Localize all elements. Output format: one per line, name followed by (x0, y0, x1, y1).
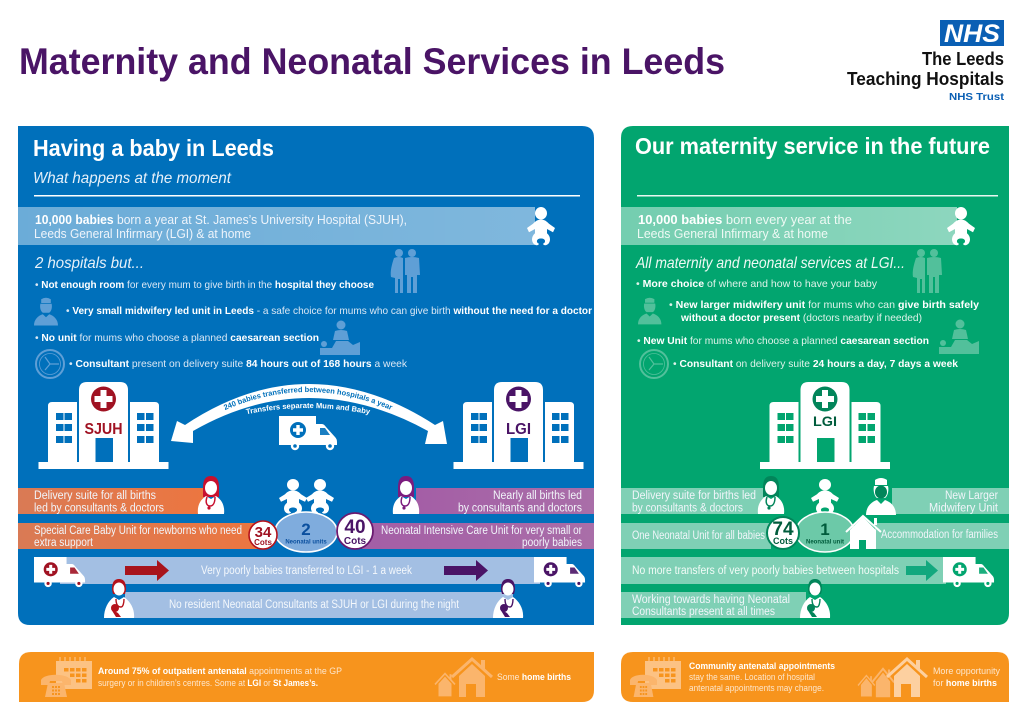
panel: future community services (621, 652, 1009, 702)
icon: baby (527, 207, 555, 245)
band: accommodation (875, 523, 1009, 549)
home births text: for home births (933, 678, 997, 689)
icon: LGI hospital: LGI (813, 413, 837, 429)
arrow: transfers between hospitals: 240 babies transferred between hospitals a year (224, 386, 392, 410)
band: one neonatal unit: One Neonatal Unit for all babies (632, 530, 765, 542)
band: delivery suite: Delivery suite for births led (632, 490, 756, 502)
arrow: purple (444, 560, 488, 581)
band: SJUH delivery suite (18, 488, 204, 514)
badge: 34 cots (249, 521, 277, 549)
band: LGI births: by consultants and doctors (458, 502, 582, 514)
band: special care: Special Care Baby Unit for newborns who need (34, 525, 242, 537)
icon: doctor with baby (800, 579, 830, 618)
badge: 40 cots: Cots (344, 536, 367, 547)
badge: 34 cots: 34 (255, 524, 272, 541)
panel: current community services (19, 652, 594, 702)
neonatal units badge: Neonatal units (285, 540, 327, 546)
bullet: midwifery: without a doctor present (doctors nearby if needed) (680, 312, 922, 324)
icon: caesarean (320, 320, 360, 355)
band: midwifery unit: New Larger (945, 490, 998, 502)
band: transfers to LGI (60, 557, 540, 584)
arrow: green (906, 560, 938, 581)
antenatal text (98, 666, 342, 689)
icon: ambulance LGI (534, 557, 585, 587)
band: no more transfers: No more transfers of very poorly babies between hospitals (632, 565, 899, 577)
bullet: caesarean: • New Unit for mums who choose a planned caesarean section (637, 335, 929, 347)
births band: 10,000 babies born a year at St. James’s University Hospital (SJUH), (35, 212, 407, 227)
antenatal text: Around 75% of outpatient antenatal appointments at the GP (98, 666, 342, 677)
icon: doctor SJUH (198, 476, 224, 514)
NHS logo (847, 20, 1005, 103)
community text: antenatal appointments may change. (689, 683, 824, 694)
icon: SJUH hospital (38, 382, 168, 469)
icon: baby (811, 479, 839, 514)
births band: 10,000 babies born every year at the (638, 212, 852, 227)
panel: having a baby in Leeds (18, 126, 594, 625)
bullet: midwifery (669, 299, 979, 324)
icon: ambulance SJUH (34, 557, 85, 587)
bullet: consultant: • Consultant present on delivery suite 84 hours out of 168 hours a week (69, 358, 408, 370)
neonatal units badge: 2 (301, 520, 311, 539)
icon: ambulance (943, 557, 994, 587)
band: one neonatal unit (621, 523, 771, 549)
icon: clock (640, 350, 668, 378)
icon: calendar (645, 657, 681, 689)
band: no resident consultants (125, 592, 513, 618)
badge: 40 cots: 40 (344, 517, 366, 538)
icon: midwife (638, 298, 661, 324)
band: accommodation: Accommodation for families (881, 529, 998, 541)
icon: telephone (41, 675, 71, 697)
badge: 74 cots: 74 (772, 519, 794, 540)
community text: Community antenatal appointments (689, 661, 835, 672)
band: neonatal intensive care: Neonatal Intensive Care Unit for very small or (381, 525, 582, 537)
band: LGI births: Nearly all births led (493, 490, 582, 502)
arrow: red (125, 560, 169, 581)
births band (18, 207, 535, 245)
icon: couple (913, 249, 942, 293)
neonatal unit badge: 1 (820, 520, 830, 539)
arrow: transfers between hospitals: Transfers separate Mum and Baby (246, 402, 370, 416)
badge: 34 cots: Cots (254, 538, 272, 547)
badge: 40 cots (337, 513, 373, 549)
NHS logo: The Leeds (922, 49, 1004, 69)
NHS logo: Teaching Hospitals (847, 69, 1004, 89)
bullet: midwifery: • Very small midwifery led unit in Leeds - a safe choice for mums who can give birth without the need for a doctor (66, 305, 592, 317)
band: midwifery unit: Midwifery Unit (929, 502, 999, 514)
band: no more transfers (621, 557, 946, 584)
bullet: consultant: • Consultant on delivery suite 24 hours a day, 7 days a week (673, 358, 958, 370)
bullet: caesarean: • No unit for mums who choose a planned caesarean section (35, 332, 319, 344)
neonatal units badge (275, 512, 337, 552)
icon: doctor with baby left (104, 579, 134, 618)
neonatal unit badge: Neonatal unit (806, 540, 844, 546)
icon: midwife (34, 298, 58, 326)
icon: clock (36, 350, 64, 378)
NHS logo: NHS (944, 20, 1000, 48)
badge: 74 cots: Cots (773, 536, 793, 546)
title: Maternity and Neonatal Services in Leeds (19, 41, 725, 82)
band: neonatal consultants: Consultants present at all times (632, 606, 775, 618)
icon: doctor LGI (393, 476, 419, 514)
births band: Leeds General Infirmary & at home (637, 226, 828, 241)
icon: houses (858, 659, 927, 697)
icon: LGI hospital (454, 382, 584, 469)
two hospitals heading: 2 hospitals but... (34, 255, 144, 272)
icon: doctor with baby right (493, 579, 523, 618)
icon: ambulance (279, 416, 337, 450)
icon: LGI hospital: LGI (506, 421, 531, 438)
badge: 74 cots (767, 517, 799, 549)
home births text: More opportunity (933, 666, 1000, 677)
heading: future: Our maternity service in the future (635, 133, 990, 159)
icon: caesarean (939, 320, 979, 354)
births band: Leeds General Infirmary (LGI) & at home (34, 226, 251, 241)
band: neonatal consultants (621, 592, 806, 618)
panel: future service (621, 126, 1009, 625)
bullet: midwifery: • New larger midwifery unit for mums who can give birth safely (669, 299, 979, 311)
band: delivery suite: by consultants & doctors (632, 502, 743, 514)
band: transfers to LGI: Very poorly babies transferred to LGI - 1 a week (201, 565, 412, 577)
arrow: transfers between hospitals (171, 384, 447, 444)
antenatal text: surgery or in children’s centres. Some at LGI or St James’s. (98, 678, 318, 689)
community text: stay the same. Location of hospital (689, 672, 815, 683)
band: SJUH delivery suite: led by consultants & doctors (34, 502, 164, 514)
icon: doctor (758, 476, 784, 514)
heading: having a baby: Having a baby in Leeds (33, 135, 274, 161)
icon: baby (947, 207, 975, 245)
bullet: more choice: • More choice of where and how to have your baby (636, 278, 878, 290)
band: midwifery unit (892, 488, 1009, 514)
icon: LGI hospital (760, 382, 890, 469)
community text (689, 661, 835, 694)
band: neonatal intensive care: poorly babies (522, 537, 582, 549)
band: neonatal consultants: Working towards having Neonatal (632, 594, 790, 606)
band: SJUH delivery suite: Delivery suite for all births (34, 490, 156, 502)
icon: couple (391, 249, 420, 293)
icon: telephone (630, 675, 657, 697)
band: special care (18, 523, 266, 549)
icon: twin babies (279, 479, 334, 514)
bullet: room: • Not enough room for every mum to give birth in the hospital they choose (35, 279, 374, 291)
home births text (933, 666, 1000, 689)
services heading: All maternity and neonatal services at LGI... (635, 255, 905, 272)
icon: calendar (56, 657, 92, 689)
subheading: What happens at the moment (33, 170, 232, 187)
NHS logo: NHS Trust (949, 91, 1005, 103)
band: special care: extra support (34, 537, 94, 549)
band: neonatal intensive care (362, 523, 594, 549)
home births text: Some home births (497, 672, 571, 683)
icon: family house (846, 516, 881, 549)
icon: houses (435, 659, 492, 697)
births band (621, 207, 957, 245)
icon: SJUH hospital: SJUH (84, 421, 122, 438)
band: delivery suite (621, 488, 766, 514)
icon: nurse (866, 478, 896, 515)
band: no resident consultants: No resident Neonatal Consultants at SJUH or LGI during the night (169, 599, 460, 611)
neonatal unit badge (796, 512, 854, 552)
band: LGI births (416, 488, 594, 514)
